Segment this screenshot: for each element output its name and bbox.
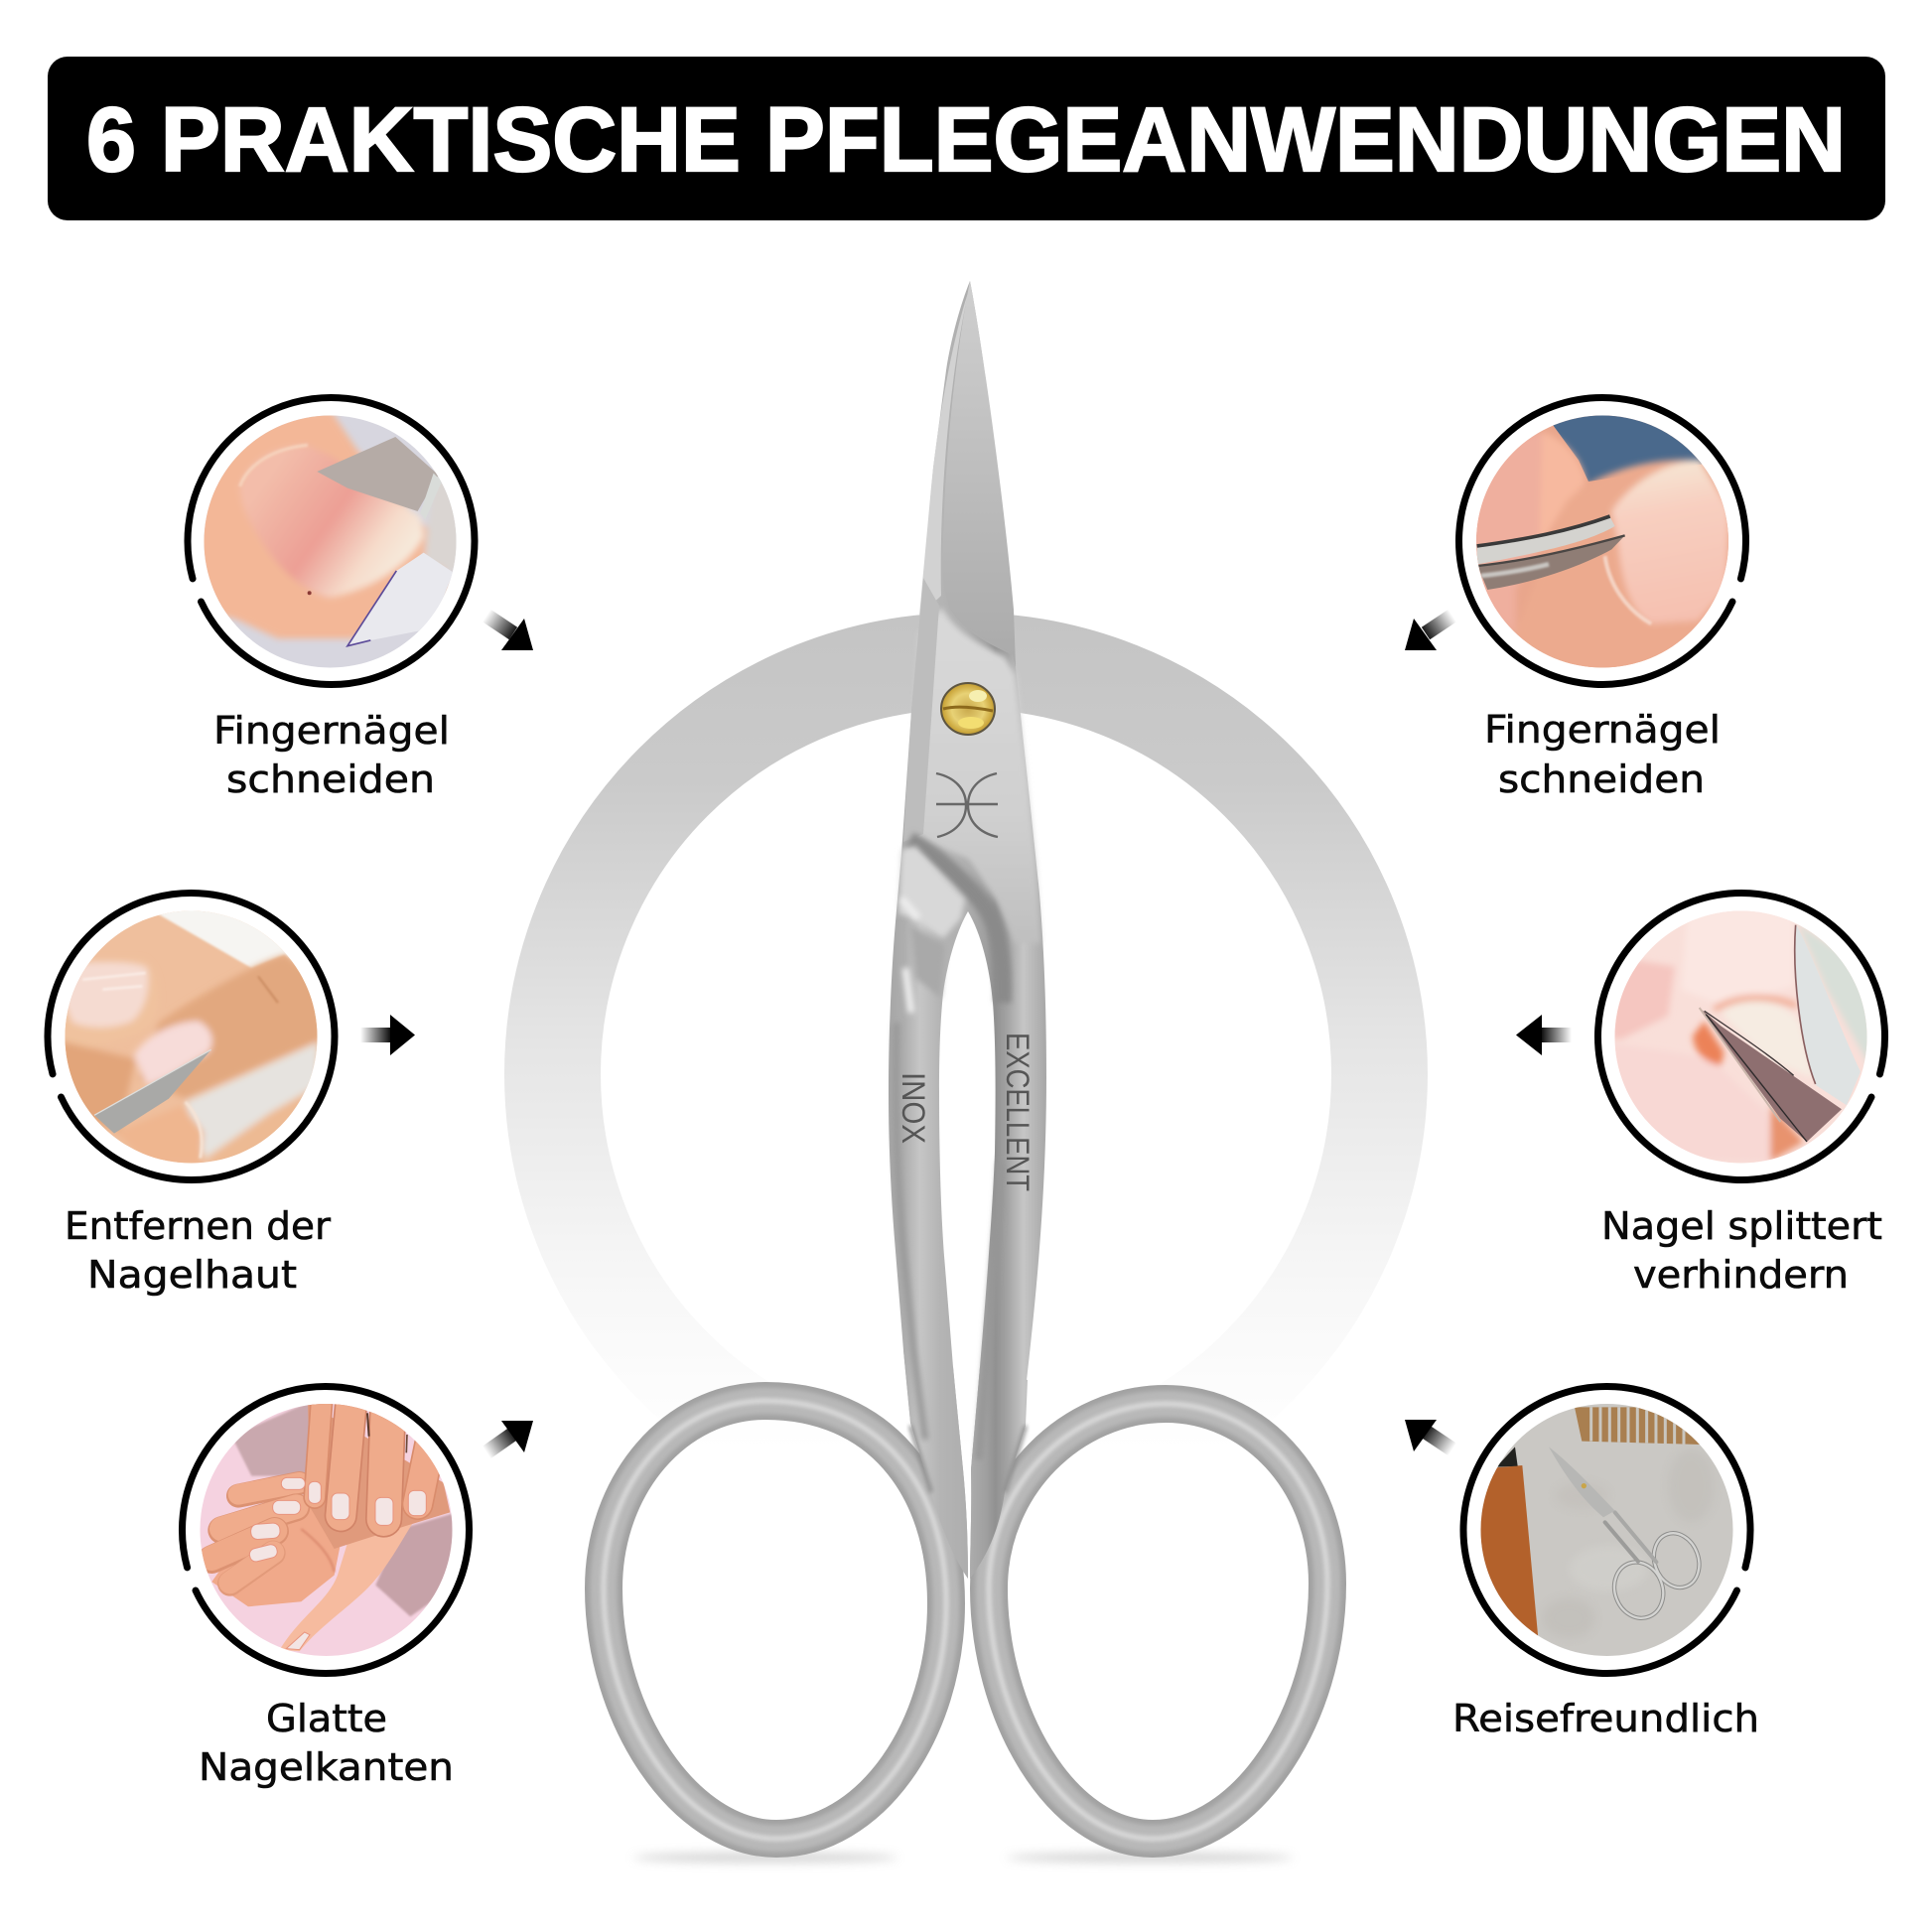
panel: middle right, Nagel splittert verhindern xyxy=(1594,890,1888,1289)
label: Fingernägel xyxy=(213,709,450,753)
arrow: bottom right xyxy=(1405,1420,1452,1451)
arrow: bottom left xyxy=(486,1421,533,1452)
ring xyxy=(1551,846,1932,1227)
pivot plate left edge xyxy=(903,578,939,842)
photo: manicured hands xyxy=(201,1404,453,1656)
upper hand fingers xyxy=(315,1400,430,1519)
scissor body with blade and shanks xyxy=(889,281,1046,1579)
panel: bottom left, Glatte Nagelkanten xyxy=(179,1383,473,1789)
blade left bevel xyxy=(919,293,968,616)
gold pivot screw xyxy=(941,683,995,735)
label: Reisefreundlich xyxy=(1452,1697,1759,1740)
title text: 6 PRAKTISCHE PFLEGEANWENDUNGEN xyxy=(86,89,1846,191)
label: Fingernägel xyxy=(1484,708,1721,752)
left loop crease xyxy=(910,1426,931,1492)
nails xyxy=(248,1477,426,1650)
ring xyxy=(150,1354,501,1706)
title banner xyxy=(48,57,1885,220)
shadow patch xyxy=(910,925,945,998)
pivot plate area xyxy=(909,608,1040,943)
label: Glatte xyxy=(266,1697,387,1740)
ring xyxy=(15,861,367,1212)
panel: top left, Fingernägel schneiden xyxy=(185,394,479,794)
lower-left highlight xyxy=(898,846,965,938)
label: Nagelhaut xyxy=(87,1253,297,1297)
label: Nagelkanten xyxy=(199,1745,454,1789)
label: verhindern xyxy=(1633,1253,1849,1297)
panel: top right, Fingernägel schneiden xyxy=(1455,394,1749,794)
engraving: EXCELLENT: EXCELLENT xyxy=(1000,1033,1035,1191)
right finger loop xyxy=(989,1404,1327,1839)
lower hand fingers xyxy=(211,1482,300,1584)
right stalk merge xyxy=(970,1367,1028,1579)
loop contact line xyxy=(967,1489,971,1648)
photo: nail splitting xyxy=(1614,911,1866,1164)
photo: travel flat lay xyxy=(1481,1404,1733,1656)
photo: cuticle removal xyxy=(66,911,318,1164)
product: scissors xyxy=(604,281,1327,1863)
thumb and wrist xyxy=(280,1519,415,1651)
background gradient ring xyxy=(552,661,1380,1487)
ground shadows under finger loops xyxy=(633,1853,1293,1863)
right loop crease xyxy=(1005,1426,1026,1492)
left shank shadow line xyxy=(897,1023,925,1440)
photo: thumb nail with tool xyxy=(1476,415,1728,667)
label: schneiden xyxy=(1498,758,1705,801)
back of upper hand xyxy=(308,1403,450,1549)
ring xyxy=(155,365,507,717)
ring xyxy=(1412,350,1793,732)
ring xyxy=(1416,1339,1798,1721)
brand mark xyxy=(936,773,998,837)
label: Entfernen der xyxy=(65,1204,331,1248)
left finger loop xyxy=(604,1401,946,1839)
panel: middle left, Entfernen der Nagelhaut xyxy=(44,890,338,1297)
stalks merging into loops xyxy=(903,1350,968,1579)
panel: bottom right, Reisefreundlich xyxy=(1455,1383,1756,1733)
photo: finger nail cut xyxy=(205,415,457,667)
blade upper surface xyxy=(942,281,1016,667)
diagonal ridge xyxy=(909,840,1003,1003)
right shank shadow line xyxy=(979,1162,1001,1459)
engraving: INOX: INOX xyxy=(896,1072,931,1144)
arrow: middle left xyxy=(360,1015,415,1055)
arrow: middle right xyxy=(1516,1015,1572,1055)
arrow: top right xyxy=(1405,616,1452,650)
mini scissors xyxy=(1605,1512,1707,1625)
label: schneiden xyxy=(226,758,435,801)
arrow: top left xyxy=(486,616,533,650)
comb xyxy=(1575,1407,1701,1445)
lower hand palm xyxy=(211,1508,340,1606)
shank highlights xyxy=(901,898,918,1013)
label: Nagel splittert xyxy=(1601,1204,1882,1248)
